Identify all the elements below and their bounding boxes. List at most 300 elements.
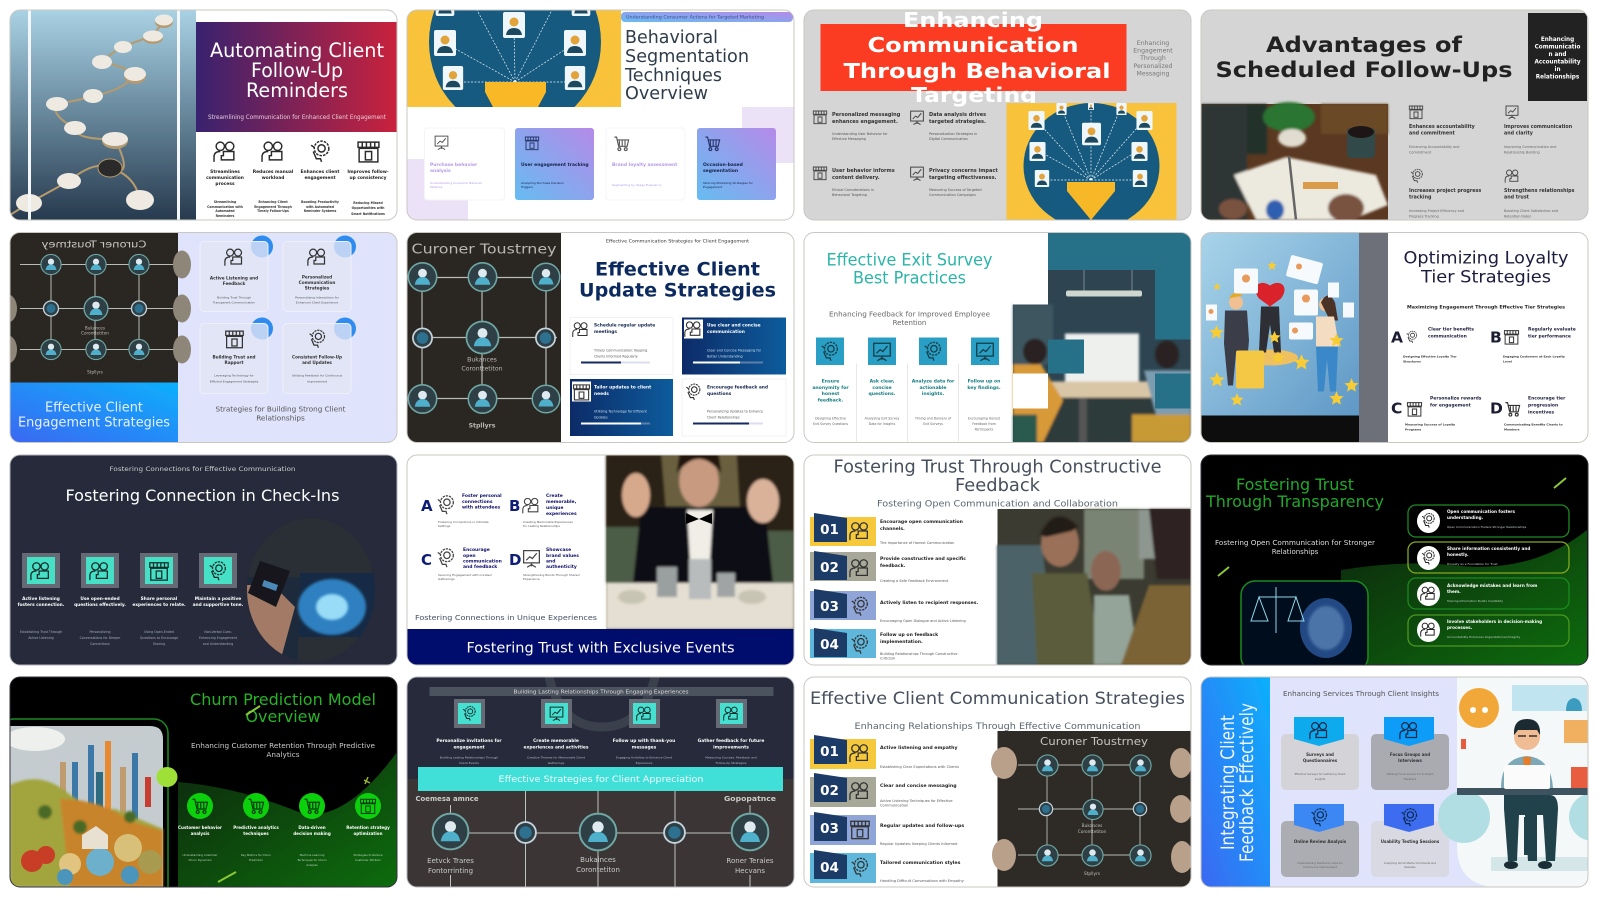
practice descriptions: Participants — [975, 428, 994, 432]
image: mirrored journey network: Stpllyrs — [87, 370, 103, 374]
strategy descriptions: Measuring Success: Feedback and — [705, 756, 757, 760]
card border — [1201, 10, 1588, 220]
icon row — [454, 699, 747, 728]
tier strategies A to D: Measuring Success of Loyalty — [1405, 422, 1455, 426]
image: journey network — [991, 731, 1193, 887]
tier strategies A to D: Communicating Benefits Clearly to — [1504, 422, 1563, 426]
benefit list: Progress Tracking — [1409, 214, 1439, 218]
tip labels: Use open-ended — [80, 596, 120, 602]
title band — [407, 629, 794, 665]
practice labels — [812, 378, 1001, 404]
tip descriptions: Non-Verbal Cues: — [204, 630, 232, 634]
model steps: Predictive analytics — [233, 825, 279, 830]
method cards: Usability Testing Sessions — [1381, 839, 1440, 844]
card: user engagement tracking: Triggers — [520, 185, 533, 189]
transparency items — [1408, 505, 1569, 646]
strategy boxes: questions — [707, 391, 732, 397]
practice descriptions: Designing Effective — [815, 416, 846, 420]
panel: Fostering Trust Through Constructive Feedback — [804, 455, 1191, 665]
transparency items: Sharing Information Builds Credibility — [1447, 599, 1503, 603]
title: Tier Strategies — [1420, 268, 1551, 288]
card: purchase behavior analysis: analysis — [430, 168, 451, 174]
photo: formal dinner trio — [606, 453, 794, 629]
benefit list: Enhancing Accountability and — [1409, 145, 1459, 149]
practice labels: actionable — [919, 385, 947, 391]
tip descriptions: Active Listening — [28, 636, 54, 640]
tier strategies A to D: Regularly evaluate — [1528, 326, 1576, 332]
card: purchase behavior analysis: Understanding Consumer Behavior — [430, 181, 483, 185]
numbered steps: Encouraging Open Dialogue and Active Listening — [880, 619, 966, 623]
experiences list: A — [421, 497, 433, 515]
numbered steps: Criticism — [880, 656, 896, 660]
strategy labels: improvements — [713, 744, 749, 750]
side subtitle: Messaging — [1137, 70, 1170, 78]
strategy cards: Consistent Follow-Up — [292, 354, 342, 360]
tier strategies A to D: Encourage tier — [1528, 396, 1566, 402]
practice descriptions: Data for Insights — [869, 422, 896, 426]
strategy cards: Rapport — [224, 360, 244, 365]
tip labels: Active listening — [22, 596, 60, 602]
method cards — [1281, 717, 1449, 877]
bottom subtitle — [216, 406, 346, 422]
icon row — [214, 141, 379, 162]
transparency items: honestly. — [1447, 552, 1469, 557]
title: Optimizing Loyalty — [1404, 248, 1568, 268]
title — [624, 28, 749, 104]
transparency items: Acknowledge mistakes and learn from — [1447, 583, 1538, 588]
card border — [1201, 455, 1588, 665]
tier strategies A to D: Clear tier benefits — [1428, 326, 1474, 332]
experiences list: B — [509, 497, 520, 515]
practice labels: Ensure — [822, 378, 839, 384]
tip descriptions: Sharing — [153, 642, 165, 646]
practice descriptions: Exit Survey Questions — [813, 422, 848, 426]
title: Segmentation — [625, 47, 749, 67]
strategy cards: Active Listening and — [210, 276, 258, 280]
image: network below band: Roner Teraies — [726, 857, 774, 865]
transparency items: Open communication fosters — [1447, 509, 1515, 514]
transparency items: Involve stakeholders in decision-making — [1447, 619, 1542, 624]
tip descriptions: Conversations for Deeper — [80, 636, 121, 640]
feature descriptions: with Automated — [306, 205, 334, 209]
bottom subtitle: Strategies for Building Strong Client — [216, 404, 346, 414]
numbered steps: Regular updates and follow-ups — [880, 823, 964, 829]
feature labels: Reduces manual — [253, 169, 294, 175]
numbered steps: 04 — [820, 637, 839, 653]
model steps: optimization — [353, 831, 383, 836]
numbered steps: 03 — [820, 599, 839, 615]
card: user engagement tracking: Analyzing Purchase Decision — [521, 181, 564, 185]
subtitle: Fostering Open Communication for Stronger — [1215, 539, 1375, 547]
title: Techniques — [624, 66, 722, 86]
experiences list: connections — [462, 499, 493, 505]
practice labels: key findings. — [967, 385, 1001, 391]
model steps: Key Metrics for Churn — [241, 853, 271, 857]
tier strategies A to D: D — [1490, 400, 1503, 418]
model steps: Understanding Customer — [182, 853, 218, 857]
numbered steps: Provide constructive and specific — [880, 556, 966, 562]
feature descriptions: Enhancing Client — [258, 200, 288, 204]
feature descriptions: Timely Follow-Ups — [257, 209, 289, 213]
feature descriptions: Reminder Systems — [304, 209, 336, 213]
card border — [407, 10, 794, 220]
title — [834, 458, 1162, 510]
title banner: Reminders — [246, 79, 348, 102]
subtitle: Enhancing Services Through Client Insights — [1283, 690, 1439, 698]
numbered steps: 02 — [820, 783, 839, 799]
tip labels: questions effectively. — [74, 602, 126, 608]
card: brand loyalty assessment — [606, 128, 685, 200]
numbered steps: Building Relationships Through Constructive — [880, 652, 958, 656]
numbered steps: Creating a Safe Feedback Environment — [880, 579, 949, 583]
subtitle: Enhancing Feedback for Improved Employee — [829, 310, 990, 318]
side subtitle: Engagement — [1133, 48, 1173, 54]
tip descriptions — [20, 630, 238, 646]
card: purchase behavior analysis: Patterns — [430, 185, 443, 189]
card: user engagement tracking — [515, 128, 594, 200]
experiences list: Experience — [523, 577, 540, 581]
image: journey network — [407, 232, 561, 442]
green wave background — [178, 752, 397, 887]
image: journey network: Curoner Toustrney — [412, 242, 557, 258]
experiences list: with attendees — [462, 504, 501, 510]
card border — [407, 677, 794, 887]
feature descriptions: Communication with — [207, 205, 243, 209]
numbered steps: channels. — [880, 526, 905, 532]
strategy boxes: communication — [707, 329, 745, 335]
feature list: enhances engagement. — [832, 119, 898, 125]
side subtitle: Enhancing — [1137, 40, 1169, 47]
numbered steps: 02 — [820, 560, 839, 576]
feature descriptions: Boosting Productivity — [301, 200, 339, 204]
transparency items: processes. — [1447, 625, 1473, 630]
tier strategies A to D: Designing Effective Loyalty Tier — [1403, 354, 1457, 358]
strategy boxes — [570, 318, 786, 436]
image: network below band: Corontetiton — [576, 866, 620, 874]
benefit list: Increases project progress — [1409, 188, 1481, 194]
model steps: Customer behavior — [178, 825, 222, 830]
title — [810, 689, 1185, 732]
experiences list: Fostering Connections in Intimate — [438, 520, 489, 524]
subtitle box — [1528, 13, 1587, 101]
card: purchase behavior analysis — [424, 128, 504, 200]
subtitle box: Relationships — [1536, 74, 1580, 80]
title band: Fostering Trust with Exclusive Events — [466, 640, 734, 656]
strategy labels: experiences and activities — [524, 744, 589, 750]
strategy cards: Building Trust Through — [217, 296, 251, 300]
tip descriptions: Enhancing Engagement — [199, 636, 238, 640]
strategy descriptions: Gatherings — [548, 761, 565, 765]
strategy descriptions: Follow-Up Strategies — [716, 761, 747, 765]
tier strategies A to D: A — [1391, 328, 1403, 346]
feature labels: engagement — [304, 175, 336, 181]
feature list: Communication Campaigns — [929, 193, 976, 197]
feature labels: process — [215, 181, 235, 187]
feature descriptions: Opportunities with — [352, 206, 384, 210]
title — [1404, 248, 1568, 288]
panel: Fostering Trust with Exclusive Events — [407, 453, 794, 665]
model steps: decision making — [293, 831, 331, 836]
image: journey network: Bukances — [1082, 823, 1103, 829]
practice labels: concise — [872, 385, 892, 391]
illustration: man at laptop — [1438, 677, 1600, 887]
model steps: techniques — [243, 831, 269, 836]
image: stepping stone path — [10, 10, 196, 220]
strategy cards: Leveraging Technology for — [214, 374, 255, 378]
feature descriptions: Reducing Missed — [353, 201, 383, 205]
experiences list: D — [509, 551, 521, 569]
feature labels: Streamlines — [210, 169, 240, 175]
tip labels: and supportive tone. — [193, 602, 244, 608]
method cards: Online Review Analysis — [1294, 839, 1347, 844]
feature list: Personalized messaging — [832, 112, 901, 118]
subtitle box: Accountability — [1534, 60, 1581, 66]
image: mirrored journey network — [0, 232, 191, 382]
title: Overview — [246, 707, 320, 726]
subtitle box: n and — [1548, 52, 1566, 58]
image: network below band: Bukainces — [580, 856, 616, 864]
numbered steps: Tailored communication styles — [880, 860, 961, 866]
numbered steps: 01 — [820, 744, 839, 760]
strategy cards: Utilizing Feedback for Continuous — [292, 374, 343, 378]
card: occasion-based segmentation: Tailoring Marketing Strategies for — [702, 181, 754, 185]
image: mirrored journey network: Curoner Toustmey — [41, 240, 146, 250]
experiences list: Settings — [438, 524, 451, 528]
strategy boxes: Tailor updates to client — [594, 384, 651, 390]
benefit list: Increasing Project Efficiency and — [1409, 209, 1464, 213]
tip labels — [18, 596, 244, 608]
transparency items: Open Communication Fosters Stronger Relationships — [1447, 525, 1527, 529]
strategy labels: Follow up with thank-you — [613, 738, 675, 744]
strategy labels: messages — [632, 746, 657, 750]
card: occasion-based segmentation: Occasion-based — [703, 162, 743, 168]
practice descriptions: Analyzing Exit Survey — [865, 416, 899, 420]
subtitle box: in — [1554, 67, 1560, 73]
title — [1205, 475, 1384, 511]
numbered steps — [810, 513, 978, 660]
numbered steps: Actively listen to recipient responses. — [880, 600, 978, 606]
strategy cards: Communication — [299, 280, 335, 285]
strategy labels: engagement — [453, 744, 485, 750]
practice labels: feedback. — [818, 398, 843, 404]
illustration: customers and stars — [1201, 232, 1388, 442]
decorative sparks — [1218, 478, 1566, 576]
title: Effective Client — [595, 258, 760, 280]
practice descriptions: Exit Surveys — [923, 422, 943, 426]
subtitle — [830, 311, 990, 325]
photo: desk with notebook — [1201, 102, 1388, 222]
panel: Fostering Trust Through Transparency — [1201, 455, 1588, 671]
strategy descriptions — [440, 756, 757, 765]
strategy boxes: Clear and Concise Messaging for — [707, 348, 762, 352]
title banner — [196, 22, 397, 132]
tier strategies A to D: Structures — [1403, 360, 1421, 364]
faint arc — [547, 667, 657, 727]
method cards: Utilizing Focus Groups for In-Depth — [1387, 772, 1434, 776]
practice descriptions: Encouraging Honest — [968, 416, 1001, 420]
model steps: Analysis — [306, 863, 318, 867]
subtitle: Retention — [893, 319, 926, 327]
benefit list: Strengthens relationships — [1504, 188, 1575, 194]
illustration: audience funnel — [1006, 103, 1176, 229]
feature list — [813, 111, 998, 197]
tier strategies A to D: B — [1490, 328, 1502, 346]
tier strategies A to D: tier performance — [1528, 334, 1571, 340]
model steps: Machine Learning — [300, 853, 325, 857]
method cards: Reviews — [1404, 865, 1416, 869]
title: Scheduled Follow-Ups — [1216, 58, 1512, 82]
card border — [804, 455, 1191, 665]
panel: Effective Exit Survey Best Practices — [804, 232, 1191, 442]
feature list: Personalization Strategies in — [929, 132, 977, 136]
method cards: Continuous Improvement — [1303, 865, 1337, 869]
tier strategies A to D: communication — [1428, 334, 1467, 340]
subtitle: Analytics — [266, 750, 300, 759]
feature descriptions: Engagement Through — [254, 205, 292, 209]
numbered steps: 03 — [820, 821, 839, 837]
title banner: Streamlining Communication for Enhanced Client Engagement — [208, 114, 387, 121]
tip labels: fosters connection. — [18, 602, 65, 608]
experiences list — [421, 493, 580, 581]
feature list: Privacy concerns impact — [929, 168, 998, 174]
feature list: Understanding User Behavior for — [832, 132, 888, 136]
model steps: Customer Attrition — [355, 858, 381, 862]
title: Feedback — [955, 476, 1041, 496]
strategy descriptions: Building Lasting Relationships Through — [440, 756, 498, 760]
title banner: Follow-Up — [251, 59, 343, 82]
card border — [1201, 232, 1588, 442]
feature descriptions: Reminders — [216, 214, 234, 218]
panel: Effective Strategies for Client Appreciation — [407, 667, 794, 887]
strategy cards: and Updates — [302, 360, 332, 365]
decorative corner shapes — [407, 107, 794, 220]
method cards: Effective Surveys for Gathering Client — [1295, 772, 1345, 776]
experiences list: unique — [546, 505, 563, 511]
practice descriptions — [813, 416, 1001, 432]
icon row — [816, 338, 999, 365]
title: Update Strategies — [579, 280, 776, 302]
card border — [407, 455, 794, 665]
tier strategies A to D: C — [1391, 400, 1402, 418]
card border — [407, 232, 794, 442]
strategy boxes: Schedule regular update — [594, 322, 655, 328]
strategy boxes: Better Understanding — [707, 354, 743, 358]
image: network below band: Hecvans — [735, 867, 765, 875]
column dividers — [856, 364, 958, 442]
practice labels: honest — [822, 391, 840, 397]
experiences list: open — [463, 554, 476, 559]
strategy descriptions: Engaging Activities to Enhance Client — [616, 756, 673, 760]
feature list: Data analysis drives — [929, 112, 986, 118]
header: Fostering Connection in Check-Ins — [66, 486, 340, 505]
numbered steps — [810, 735, 965, 883]
experiences list: experiences — [546, 511, 577, 517]
benefit list: Relationship Building — [1504, 150, 1540, 154]
title banner — [820, 8, 1126, 107]
bottom subtitle: Relationships — [256, 414, 305, 422]
model steps — [178, 793, 390, 867]
title block: Integrating Client — [1217, 715, 1239, 850]
header: Fostering Connections for Effective Communication — [110, 466, 296, 473]
title: Behavioral — [625, 28, 718, 48]
tip descriptions: Questions to Encourage — [140, 636, 178, 640]
strategy boxes: Encourage feedback and — [707, 384, 768, 390]
transparency items: understanding. — [1447, 515, 1484, 520]
card: occasion-based segmentation: segmentation — [703, 168, 738, 174]
subtitle pill: Understanding Consumer Actions for Targeted Marketing — [626, 14, 764, 20]
card border — [1201, 677, 1588, 887]
tier strategies A to D — [1391, 326, 1576, 432]
photo: team conversation — [997, 509, 1191, 665]
feature descriptions — [207, 200, 385, 218]
photo: hand holding phone over glowing device — [245, 515, 380, 662]
panel: Effective Client Communication Strategies — [804, 677, 1193, 887]
panel: Effective Client Engagement Strategies — [0, 232, 397, 442]
image: network below band: Eetvck Trares — [427, 857, 474, 865]
model steps: Retention strategy — [346, 825, 390, 830]
feature list: Effective Messaging — [832, 137, 866, 141]
practice descriptions: Timing and Delivery of — [914, 416, 952, 420]
experiences list: communication — [463, 558, 502, 564]
experiences list: Gatherings — [438, 577, 455, 581]
strategy cards: Personalized — [302, 274, 332, 280]
image: network below band: Coemesa amnce — [416, 795, 479, 803]
title: Overview — [625, 84, 708, 104]
title: Effective Exit Survey — [826, 250, 992, 270]
experiences list: Showcase — [546, 547, 571, 553]
practice labels: Ask clear, — [870, 378, 895, 384]
image: mirrored journey network: Bukances — [85, 326, 105, 330]
title — [1216, 33, 1512, 82]
tier strategies A to D: for engagement — [1430, 402, 1472, 408]
feature descriptions: Smart Notifications — [351, 212, 385, 216]
strategy cards: Building Trust and — [212, 354, 256, 360]
strategy cards: Improvement — [307, 380, 328, 384]
practice labels: questions. — [868, 391, 896, 397]
title: Fostering Trust — [1236, 475, 1354, 494]
title block — [10, 382, 178, 442]
practice labels: anonymity for — [812, 385, 849, 391]
method cards: Insights — [1315, 777, 1326, 781]
strategy cards — [200, 242, 351, 394]
card border — [804, 232, 1191, 442]
title banner: Targeting — [911, 83, 1037, 107]
strategy boxes: Client Relationships — [707, 416, 740, 420]
title — [579, 238, 776, 302]
strategy descriptions: Creative Themes for Memorable Client — [527, 756, 586, 760]
subtitle box: Communicatio — [1535, 44, 1580, 50]
experiences list: Strengthening Bonds Through Shared — [523, 573, 580, 577]
image: journey network: Coronttetiton — [1078, 829, 1107, 835]
subtitle: Maximizing Engagement Through Effective Tier Strategies — [1407, 304, 1565, 310]
image: network below band: Fontorrinting — [428, 867, 473, 875]
strategy cards: Efficient Engagement Strategies — [210, 380, 259, 384]
experiences list: Create — [546, 493, 563, 499]
method cards: Feedback — [1404, 777, 1417, 781]
transparency items: them. — [1447, 589, 1461, 594]
title band: Effective Strategies for Client Appreciation — [498, 775, 704, 785]
feature list: Behavioral Targeting — [832, 193, 867, 197]
title: Enhancing Relationships Through Effective Communication — [854, 722, 1140, 732]
title: Effective Communication Strategies for Client Engagement — [606, 238, 749, 244]
title: Best Practices — [853, 268, 966, 288]
feature list: Measuring Success of Targeted — [929, 188, 982, 192]
experiences list: C — [421, 551, 432, 569]
model steps: Techniques for Churn — [296, 858, 327, 862]
image: journey network: Curoner Toustrney — [1040, 735, 1149, 748]
feature descriptions: Streamlining — [214, 200, 236, 204]
title banner: Communication — [868, 33, 1078, 57]
